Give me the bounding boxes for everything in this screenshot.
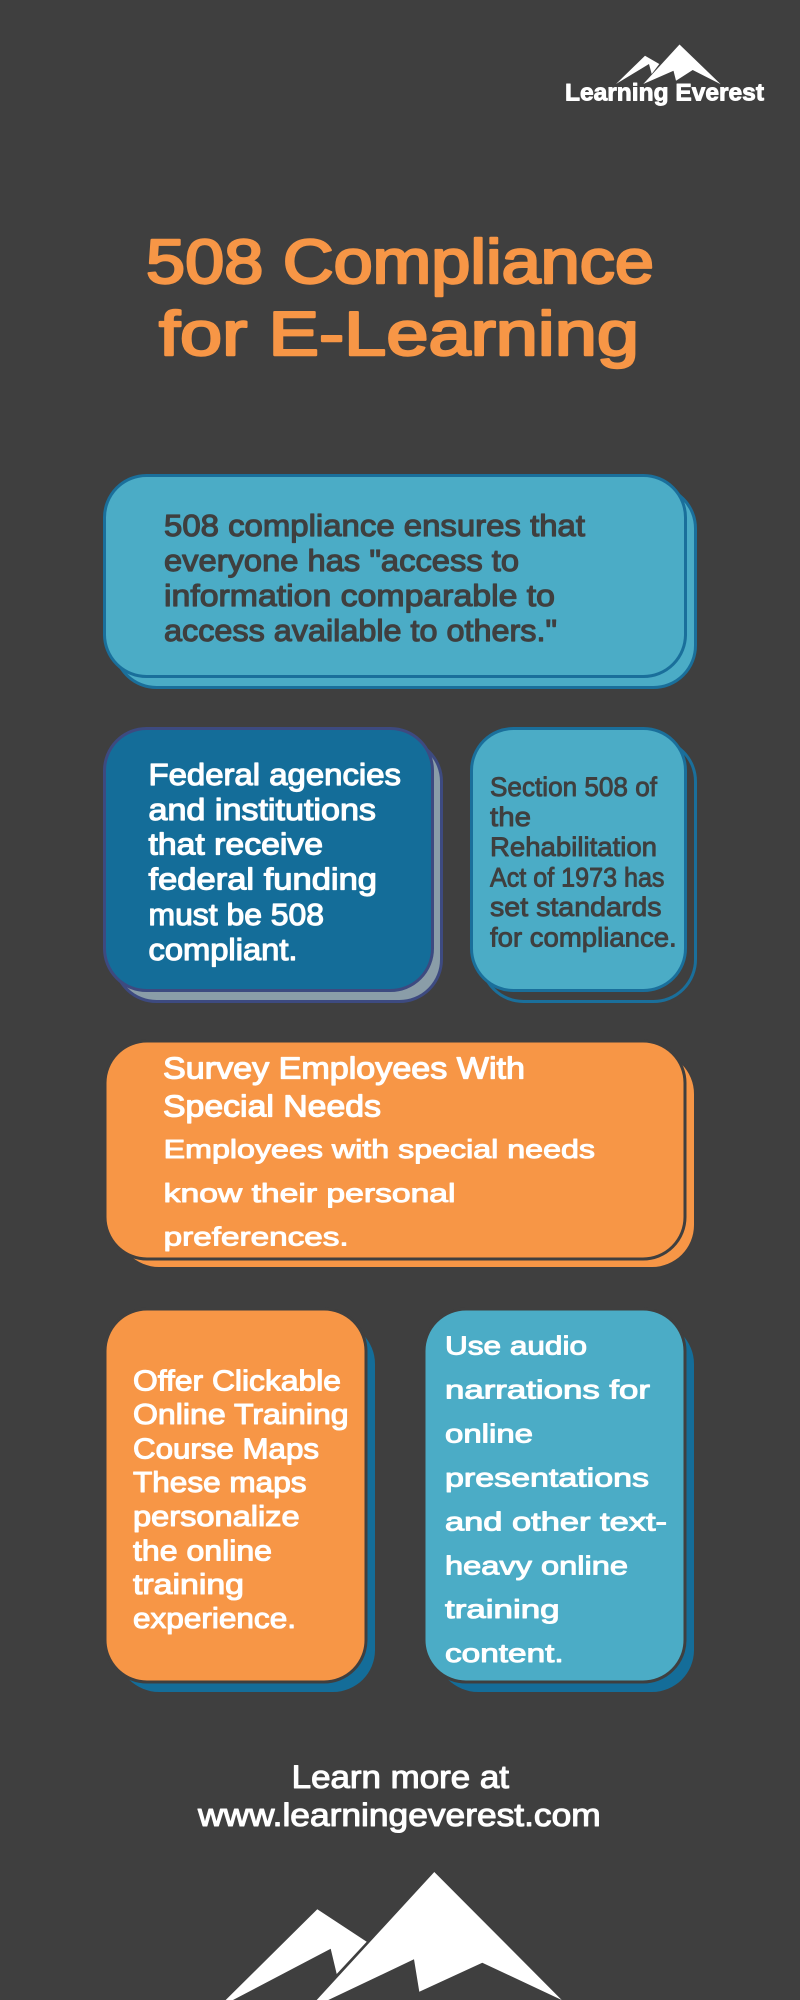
call to action: learn more: Learn more at bbox=[292, 1759, 509, 1795]
icon: logo mountains bbox=[616, 44, 721, 84]
audio narrations text bbox=[445, 1330, 667, 1668]
audio narrations text: Use audio bbox=[445, 1330, 587, 1360]
call to action: learn more: www.learningeverest.com bbox=[197, 1797, 601, 1833]
course maps text: Online Training bbox=[133, 1399, 349, 1431]
audio narrations text: heavy online bbox=[445, 1550, 628, 1580]
section 508 text bbox=[490, 772, 677, 952]
federal agencies text: Federal agencies bbox=[148, 757, 401, 792]
survey body: Employees with special needs bbox=[164, 1134, 595, 1164]
definition text: everyone has "access to bbox=[164, 543, 519, 578]
course maps text: These maps bbox=[133, 1467, 306, 1499]
panel: clickable course maps bbox=[105, 1309, 375, 1692]
section 508 text: for compliance. bbox=[490, 922, 677, 952]
federal agencies text: federal funding bbox=[148, 862, 377, 897]
survey heading: Survey Employees With bbox=[163, 1050, 525, 1085]
call to action: learn more bbox=[197, 1759, 601, 1833]
survey heading: Special Needs bbox=[163, 1089, 381, 1124]
definition text bbox=[164, 508, 585, 648]
course maps text: experience. bbox=[133, 1603, 296, 1635]
section 508 text: Act of 1973 has bbox=[490, 862, 664, 892]
audio narrations text: content. bbox=[445, 1638, 564, 1668]
audio narrations text: narrations for bbox=[445, 1374, 650, 1404]
icon: footer mountains bbox=[226, 1872, 562, 2000]
survey heading bbox=[163, 1050, 525, 1124]
course maps text: personalize bbox=[133, 1501, 300, 1533]
panel: 508 compliance definition bbox=[104, 476, 696, 688]
logo: Learning Everest bbox=[565, 44, 764, 107]
course maps text: Offer Clickable bbox=[133, 1365, 341, 1397]
federal agencies text bbox=[148, 757, 401, 967]
federal agencies text: and institutions bbox=[148, 792, 376, 827]
logo wordmark: Learning Everest bbox=[565, 80, 764, 107]
panel: federal agencies bbox=[104, 728, 442, 1002]
title: 508 Compliance bbox=[146, 228, 654, 297]
audio narrations text: training bbox=[445, 1594, 560, 1624]
audio narrations text: and other text- bbox=[445, 1506, 667, 1536]
federal agencies text: compliant. bbox=[148, 932, 298, 967]
course maps text: Course Maps bbox=[133, 1433, 319, 1465]
federal agencies text: must be 508 bbox=[148, 897, 324, 932]
panel: section 508 bbox=[472, 728, 696, 1002]
section 508 text: set standards bbox=[490, 892, 662, 922]
panel: survey employees bbox=[105, 1041, 694, 1267]
section 508 text: Rehabilitation bbox=[490, 832, 657, 862]
title bbox=[146, 228, 654, 369]
course maps text bbox=[133, 1365, 349, 1635]
survey body: know their personal bbox=[164, 1178, 455, 1208]
panel: audio narrations bbox=[424, 1309, 694, 1692]
section 508 text: the bbox=[490, 802, 531, 832]
survey body: preferences. bbox=[164, 1222, 349, 1252]
title: for E-Learning bbox=[159, 300, 639, 369]
course maps text: training bbox=[133, 1569, 244, 1601]
audio narrations text: online bbox=[445, 1418, 533, 1448]
definition text: 508 compliance ensures that bbox=[164, 508, 585, 543]
section 508 text: Section 508 of bbox=[490, 772, 657, 802]
survey body bbox=[164, 1134, 595, 1252]
federal agencies text: that receive bbox=[148, 827, 323, 862]
audio narrations text: presentations bbox=[445, 1462, 649, 1492]
definition text: information comparable to bbox=[164, 578, 555, 613]
course maps text: the online bbox=[133, 1535, 272, 1567]
definition text: access available to others." bbox=[164, 613, 557, 648]
